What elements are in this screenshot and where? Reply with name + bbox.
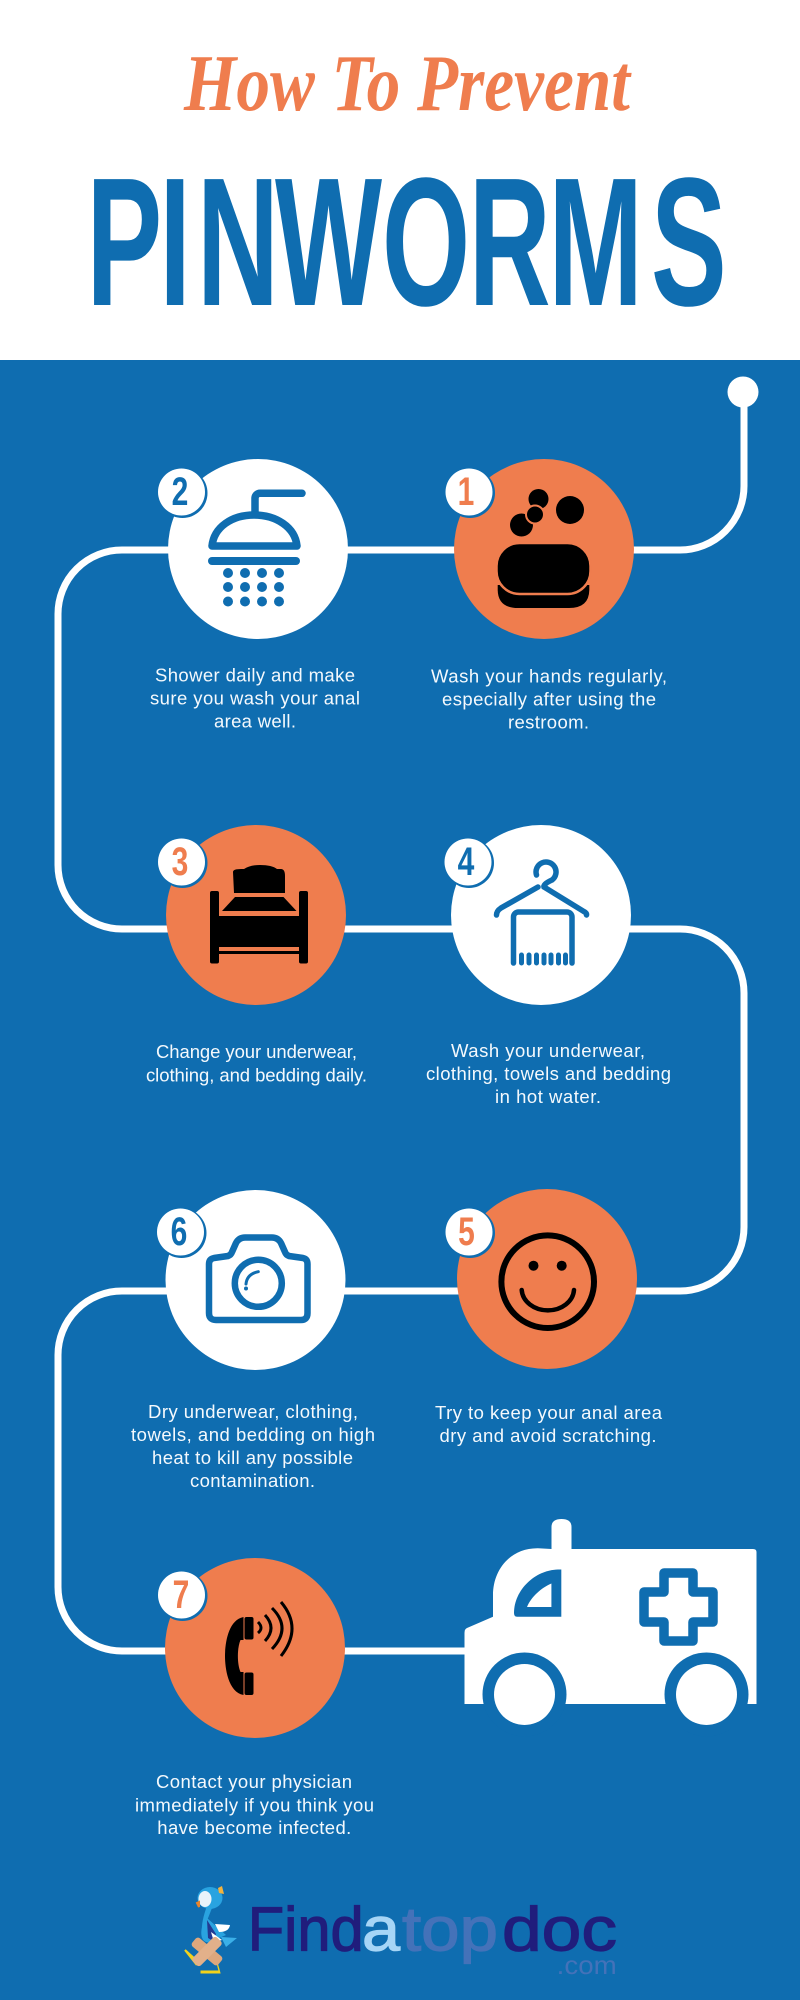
text 6 (131, 1401, 375, 1491)
text 4: clothing, towels and bedding (426, 1063, 671, 1084)
text 3 (146, 1041, 367, 1086)
logo wordmark: top (402, 1896, 498, 1965)
text 7: have become infected. (157, 1817, 351, 1838)
text 4 (426, 1040, 671, 1107)
text 5 (435, 1402, 663, 1446)
circle (454, 459, 634, 639)
text 4: in hot water. (495, 1086, 601, 1107)
badge 1: 1 (458, 470, 474, 514)
badge 7: 7 (173, 1573, 189, 1617)
icon: hanger and towel (496, 862, 587, 963)
circle (165, 1558, 345, 1738)
text 1: restroom. (508, 712, 589, 733)
path: white connector line (58, 392, 744, 1651)
icon: smiley face (501, 1235, 594, 1328)
badge 2: 2 (172, 470, 188, 514)
step 5: smiley (435, 1189, 663, 1446)
icon: shower head (208, 493, 302, 606)
logo wordmark: .com (557, 1950, 617, 1980)
text 3: Change your underwear, (156, 1041, 357, 1062)
icon: bed (210, 865, 308, 964)
badge 4 (444, 838, 494, 888)
circle (168, 459, 348, 639)
circle (166, 825, 346, 1005)
text 6: contamination. (190, 1470, 315, 1491)
text 5: Try to keep your anal area (435, 1402, 663, 1423)
text 2 (150, 665, 360, 732)
step 3: bed (146, 825, 367, 1086)
text 3: clothing, and bedding daily. (146, 1064, 367, 1086)
text 1: especially after using the (442, 689, 656, 710)
text 7 (135, 1771, 374, 1838)
text 7: Contact your physician (156, 1771, 352, 1792)
text 5: dry and avoid scratching. (440, 1425, 656, 1446)
step 2: shower (150, 459, 360, 732)
badge 5 (445, 1208, 495, 1258)
step 4: towel on hanger (426, 825, 671, 1107)
circle (166, 1190, 346, 1370)
logo mascot: bird (185, 1886, 237, 1973)
logo wordmark (248, 1896, 617, 1980)
icon: telephone (225, 1602, 292, 1695)
title: PINWORMS: PINWORMS (86, 140, 727, 345)
icon: camera (209, 1238, 308, 1320)
icon: soap (496, 489, 590, 608)
step 7: phone (135, 1558, 374, 1838)
logo wordmark: doc (502, 1896, 617, 1965)
text 1 (431, 666, 667, 733)
text 7: immediately if you think you (135, 1794, 374, 1816)
badge 7 (158, 1571, 208, 1621)
badge 1 (445, 468, 495, 518)
badge 4: 4 (458, 840, 475, 884)
badge 6 (156, 1208, 206, 1258)
circle (451, 825, 631, 1005)
text 6: towels, and bedding on high (131, 1424, 375, 1445)
text 2: area well. (214, 711, 296, 732)
logo wordmark: Find (248, 1896, 364, 1965)
badge 3 (158, 838, 208, 888)
badge 6: 6 (171, 1210, 187, 1254)
badge 5: 5 (458, 1210, 475, 1254)
step 6: camera (131, 1190, 375, 1491)
text 2: sure you wash your anal (150, 688, 360, 709)
logo: Findatopdoc.com (185, 1886, 617, 1980)
text 2: Shower daily and make (155, 665, 355, 686)
text 6: heat to kill any possible (152, 1447, 353, 1468)
icon: ambulance (464, 1519, 756, 1736)
text 4: Wash your underwear, (451, 1040, 645, 1061)
title: How To Prevent: How To Prevent (183, 40, 632, 128)
logo wordmark: a (362, 1896, 401, 1965)
badge 2 (158, 468, 208, 518)
circle (457, 1189, 637, 1369)
text 1: Wash your hands regularly, (431, 666, 667, 687)
text 6: Dry underwear, clothing, (148, 1401, 358, 1422)
step 1: soap (431, 459, 667, 733)
badge 3: 3 (172, 840, 188, 884)
path start dot (728, 376, 758, 408)
